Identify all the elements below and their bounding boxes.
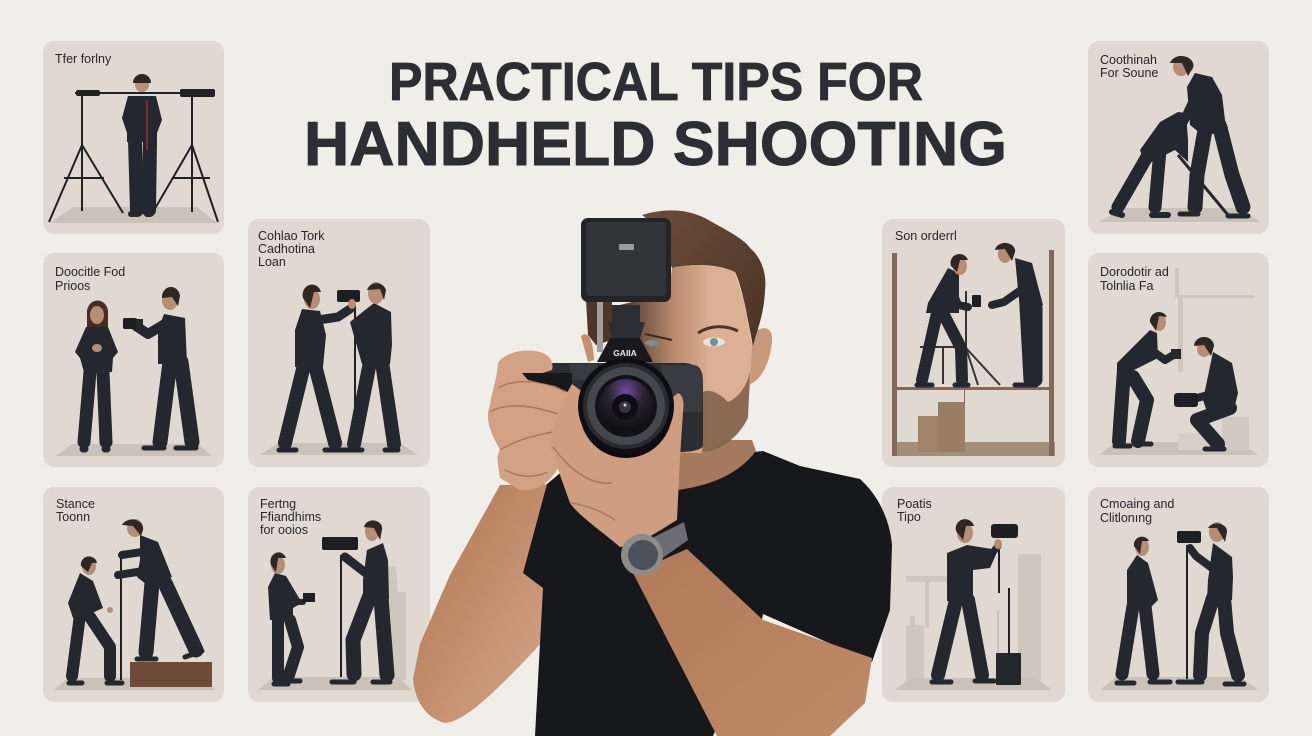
figure: man raising camera [932, 519, 1018, 682]
figure: bending person [1112, 112, 1188, 215]
camera body [522, 338, 703, 455]
flash mount [608, 305, 645, 338]
wall shapes [1175, 268, 1255, 372]
camera brand label: GAIIA [613, 348, 637, 358]
ear [750, 328, 772, 384]
hair [642, 210, 765, 346]
wooden frame and stairs [892, 250, 1055, 456]
stool and tripod [920, 291, 1000, 385]
beard and moustache [702, 372, 750, 452]
tripod case [996, 550, 1021, 685]
walking stick [1178, 155, 1228, 215]
wooden step [130, 662, 212, 687]
figure: small man [68, 556, 122, 683]
figure: seated man [1174, 337, 1238, 449]
panel: instructor and seated man: Dorodotir ad [1100, 265, 1169, 279]
panel: two figures, woman and photographer: Prioos [55, 279, 90, 293]
figure: right man [322, 520, 390, 682]
seat block [1178, 417, 1249, 450]
panel: posture tips: Tipo [897, 510, 921, 524]
panel: stance: Stance [56, 497, 95, 511]
panel: crossing and positioning [1088, 487, 1269, 702]
neck [660, 440, 756, 490]
panel: instructor and seated man [1088, 253, 1269, 467]
left ear [581, 334, 594, 362]
panel: two photographers facing: Cadhotina [258, 242, 315, 256]
figure: woman [75, 300, 118, 449]
panel: wooden frame scene [882, 219, 1065, 467]
figure: left man with camera [917, 254, 981, 385]
support pole [340, 555, 342, 677]
knuckle lines [553, 447, 615, 520]
panel: crossing and positioning: Clitlonıng [1100, 511, 1152, 525]
title [304, 52, 1007, 179]
arm: upper arm and forearm on the left [413, 484, 557, 723]
fingers [490, 382, 565, 476]
background blocks [906, 554, 1041, 683]
central photographer [413, 210, 892, 736]
forearm on the right [633, 549, 872, 736]
lens [578, 358, 674, 458]
panel: framing: for ooios [260, 523, 308, 537]
figure: man with camera [123, 287, 196, 448]
panel: stance [43, 487, 224, 702]
support pole [120, 558, 122, 680]
figure: left man [268, 552, 315, 684]
figure: right man with camera [1177, 522, 1244, 684]
panel: stance: Toonn [56, 510, 90, 524]
panel: two figures, woman and photographer [43, 253, 224, 467]
hand under lens [550, 384, 683, 547]
panel: crossing and positioning: Cmoaing and [1100, 497, 1174, 511]
support pole [354, 305, 356, 446]
panel: instructor and seated man: Tolnlia Fa [1100, 279, 1154, 293]
figure: left man [1117, 537, 1170, 683]
figure: right man bending [992, 243, 1043, 385]
figure: right man [337, 282, 398, 450]
panel: framing [248, 487, 430, 702]
hand gripping camera [488, 350, 572, 490]
hair behind flash [586, 300, 612, 345]
figure: standing person [122, 74, 162, 214]
black t-shirt [523, 440, 892, 736]
figure: left man [1115, 312, 1181, 446]
eyes and brows [645, 327, 738, 346]
flash unit [581, 218, 671, 302]
panel: bending pose: Coothinah [1100, 53, 1157, 67]
figure: man on step [118, 519, 202, 659]
panel: wooden frame scene: Son orderrl [895, 229, 957, 243]
title: HANDHELD SHOOTING [304, 110, 1007, 179]
face [612, 265, 752, 453]
figure: standing man [1160, 56, 1248, 216]
panel: two photographers facing [248, 219, 430, 467]
panel: framing: Ffiandhims [260, 510, 321, 524]
watch [621, 522, 688, 576]
panel: two photographers facing: Loan [258, 255, 286, 269]
tripods and bar [49, 89, 218, 222]
support pole [1178, 545, 1196, 681]
panel: tripod setup [43, 41, 224, 234]
camera grip [522, 373, 572, 394]
title: PRACTICAL TIPS FOR [389, 52, 923, 112]
panel: tripod setup: Tfer forlny [55, 52, 112, 66]
panel: two photographers facing: Cohlao Tork [258, 229, 325, 243]
figure: left man [279, 285, 350, 450]
panel: bending pose: For Soune [1100, 66, 1158, 80]
panel: bending pose [1088, 41, 1269, 234]
panel: posture tips [882, 487, 1065, 702]
panel: two figures, woman and photographer: Doocitle Fod [55, 265, 125, 279]
panel: posture tips: Poatis [897, 497, 932, 511]
panel: framing: Fertng [260, 497, 296, 511]
